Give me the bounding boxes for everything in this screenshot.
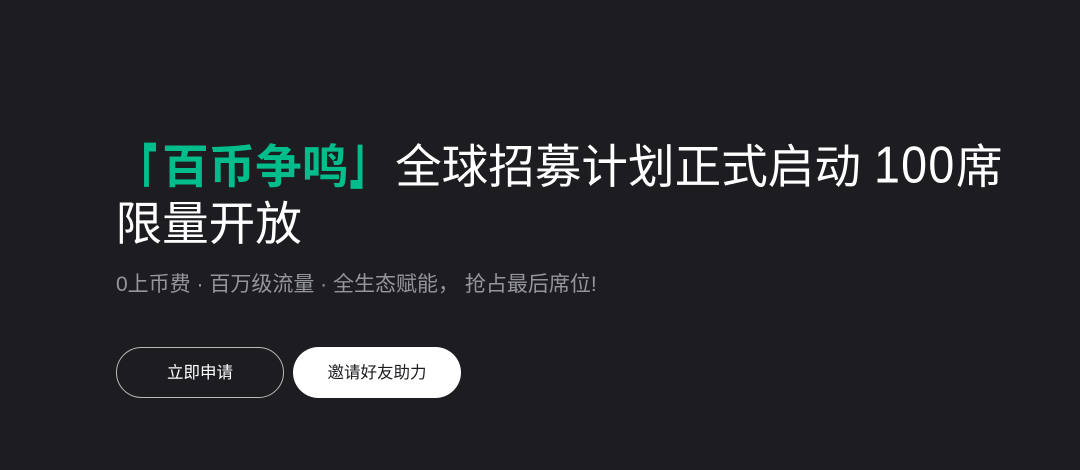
heading	[116, 122, 1003, 250]
button: apply now: 立即申请	[167, 364, 233, 382]
heading line 1: 百币争鸣 全球招募计划正式启动 席	[162, 141, 1003, 193]
heading line 2: 限量开放	[116, 198, 302, 250]
heading line 1: 」	[351, 122, 384, 196]
heading line 1: 100	[874, 135, 956, 194]
subtitle: 0上币费 · 百万级流量 · 全生态赋能， 抢占最后席位!	[116, 273, 597, 296]
heading line 1: 「	[122, 140, 156, 214]
button: invite friends	[293, 347, 461, 398]
button: invite friends: 邀请好友助力	[328, 364, 426, 382]
heading line 1	[122, 122, 1003, 214]
button: apply now	[116, 347, 284, 398]
